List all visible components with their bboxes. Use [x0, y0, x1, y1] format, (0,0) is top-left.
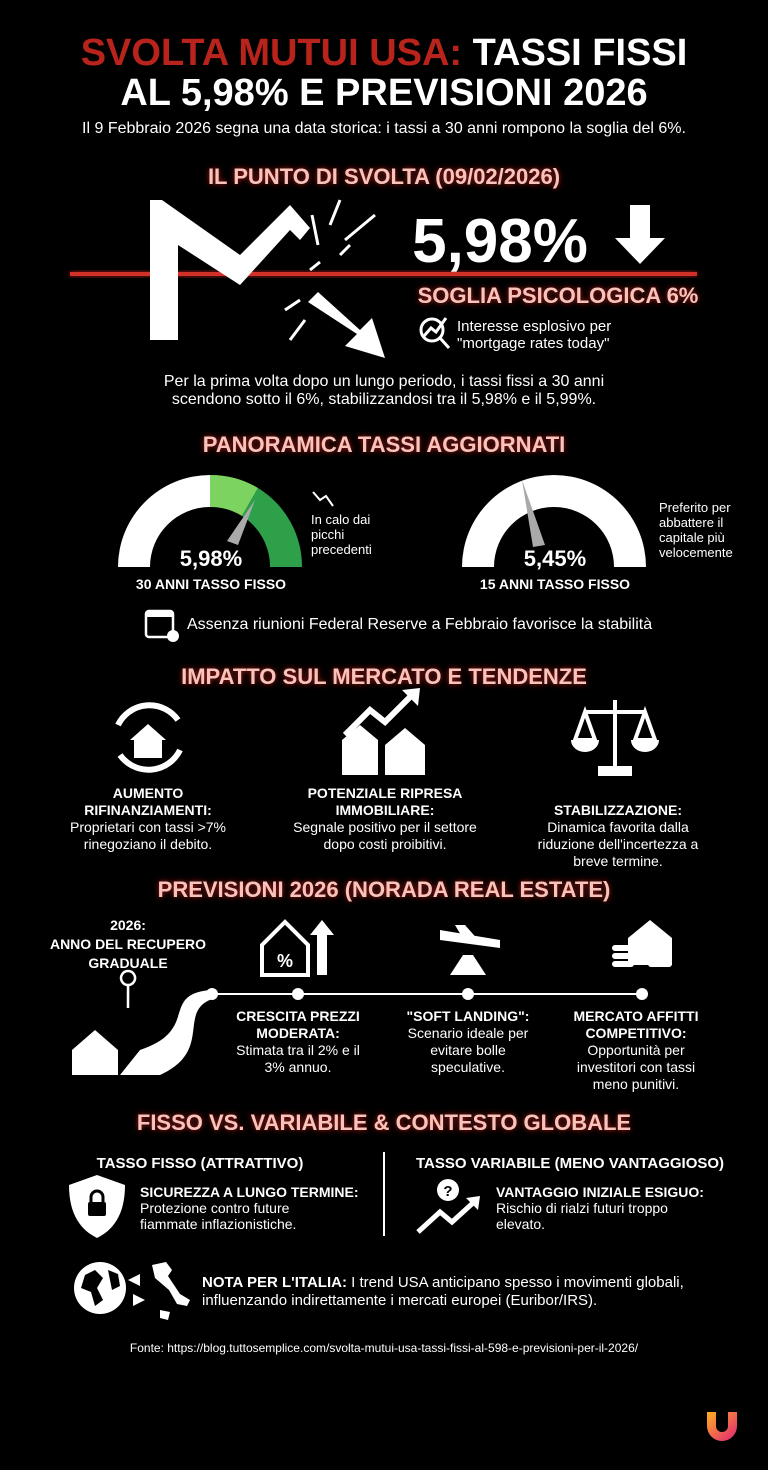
heading: panoramica: PANORAMICA TASSI AGGIORNATI: [203, 432, 565, 457]
text: aumento: Proprietari con tassi >7%: [70, 819, 226, 835]
big rate: 5,98%: [412, 207, 588, 276]
note: preferito: velocemente: [659, 545, 733, 560]
source: Fonte: https://blog.tuttosemplice.com/svolta-mutui-usa-tassi-fissi-al-598-e-previsioni-per-il-2026/: [130, 1341, 639, 1355]
soglia label: SOGLIA PSICOLOGICA 6%: [418, 283, 698, 308]
text: soft landing: "SOFT LANDING":: [407, 1008, 529, 1024]
note: in calo: picchi: [311, 527, 344, 542]
icon: plane landing: [440, 925, 500, 975]
text: crescita: Stimata tra il 2% e il: [236, 1042, 360, 1058]
text: soft landing: speculative.: [431, 1059, 505, 1075]
title: AL 5,98% E PREVISIONI 2026: [120, 72, 648, 114]
text: vantaggio: [496, 1184, 704, 1232]
icon: house percent: [262, 920, 334, 975]
subheadings: [97, 1155, 724, 1172]
text: aumento: rinegoziano il debito.: [84, 836, 212, 852]
text: affitti: [574, 1008, 698, 1092]
icon: scales: [573, 700, 657, 774]
heading: punto di svolta: IL PUNTO DI SVOLTA (09/02/2026): [208, 164, 560, 189]
note: preferito: Preferito per: [659, 500, 731, 515]
subheadings: TASSO FISSO (ATTRATTIVO): [97, 1155, 303, 1172]
fed note: Assenza riunioni Federal Reserve a Febbraio favorisce la stabilità: [187, 616, 652, 633]
note: preferito: capitale più: [659, 530, 725, 545]
note: in calo: In calo dai: [311, 512, 370, 527]
text: stabilizzazione: Dinamica favorita dalla: [547, 819, 689, 835]
icon: shield: [69, 1175, 125, 1238]
note: in calo: [311, 492, 372, 557]
subheadings: TASSO VARIABILE (MENO VANTAGGIOSO): [416, 1155, 724, 1172]
logo: [707, 1412, 737, 1441]
text: sicurezza: [140, 1184, 359, 1232]
text: affitti: COMPETITIVO:: [585, 1025, 687, 1041]
text: soft landing: Scenario ideale per: [408, 1025, 529, 1041]
paragraph: scendono sotto il 6%, stabilizzandosi tra il 5,98% e il 5,99%.: [172, 391, 596, 408]
text: 2026: [50, 917, 206, 971]
heading: previsioni: PREVISIONI 2026 (NORADA REAL ESTATE): [158, 877, 610, 902]
text: ripresa: [293, 785, 477, 852]
text: stabilizzazione: [538, 802, 699, 869]
text: sicurezza: fiammate inflazionistiche.: [140, 1216, 296, 1232]
icon: coins house: [612, 920, 672, 967]
text: aumento: RIFINANZIAMENTI:: [84, 802, 212, 818]
gauge 30 anni: 5,98%: [180, 546, 242, 571]
gauge 15 anni: 15 ANNI TASSO FISSO: [480, 576, 630, 592]
text: affitti: MERCATO AFFITTI: [574, 1008, 698, 1024]
note: in calo: precedenti: [311, 542, 372, 557]
threshold line: [70, 272, 697, 276]
search text: Interesse esplosivo per: [457, 318, 611, 335]
note: preferito: abbattere il: [659, 515, 723, 530]
text: ripresa: IMMOBILIARE:: [336, 802, 434, 818]
text: aumento: [70, 785, 226, 852]
text: stabilizzazione: breve termine.: [573, 853, 663, 869]
gauge 15 anni: [462, 475, 646, 592]
icon: house percent: %: [277, 951, 293, 971]
title: [81, 32, 687, 114]
subtitle: Il 9 Febbraio 2026 segna una data storica: i tassi a 30 anni rompono la soglia del 6%.: [82, 120, 686, 137]
text: vantaggio: Rischio di rialzi futuri troppo: [496, 1200, 668, 1216]
text: ripresa: POTENZIALE RIPRESA: [308, 785, 462, 801]
text: vantaggio: elevato.: [496, 1216, 545, 1232]
nota italia: [202, 1274, 684, 1309]
text: crescita: CRESCITA PREZZI: [236, 1008, 360, 1024]
text: aumento: AUMENTO: [113, 785, 183, 801]
text: stabilizzazione: riduzione dell'incertezza a: [538, 836, 699, 852]
icon: question trend: ?: [443, 1183, 453, 1200]
text: sicurezza: SICUREZZA A LUNGO TERMINE:: [140, 1184, 359, 1200]
icon: road with house: [72, 971, 215, 1075]
text: crescita: [236, 1008, 360, 1075]
search text: [457, 318, 611, 352]
heading: impatto: IMPATTO SUL MERCATO E TENDENZE: [181, 664, 587, 689]
search text: "mortgage rates today": [457, 335, 609, 352]
title: SVOLTA MUTUI USA: TASSI FISSI: [81, 32, 687, 74]
icon: down arrow: [615, 205, 665, 264]
text: crescita: 3% annuo.: [265, 1059, 331, 1075]
paragraph: [164, 373, 604, 408]
gauge 15 anni: 5,45%: [524, 546, 586, 571]
text: 2026: GRADUALE: [88, 955, 168, 971]
text: 2026: ANNO DEL RECUPERO: [50, 936, 206, 952]
nota italia: NOTA PER L'ITALIA: I trend USA anticipano spesso i movimenti globali,: [202, 1274, 684, 1291]
text: sicurezza: Protezione contro future: [140, 1200, 290, 1216]
text: soft landing: [407, 1008, 529, 1075]
paragraph: Per la prima volta dopo un lungo periodo, i tassi fissi a 30 anni: [164, 373, 604, 390]
icon: question trend: [418, 1179, 480, 1232]
icon: calendar: [146, 611, 179, 642]
text: stabilizzazione: STABILIZZAZIONE:: [554, 802, 682, 818]
nota italia: influenzando indirettamente i mercati europei (Euribor/IRS).: [202, 1292, 597, 1309]
chart: breaking line: [150, 200, 385, 358]
gauge 30 anni: 30 ANNI TASSO FISSO: [136, 576, 286, 592]
heading: fisso vs variabile: FISSO VS. VARIABILE & CONTESTO GLOBALE: [137, 1110, 631, 1135]
note: preferito: [659, 500, 733, 560]
text: 2026: 2026:: [110, 917, 146, 933]
text: vantaggio: VANTAGGIO INIZIALE ESIGUO:: [496, 1184, 704, 1200]
text: ripresa: dopo costi proibitivi.: [324, 836, 446, 852]
text: soft landing: evitare bolle: [430, 1042, 506, 1058]
timeline: [206, 988, 648, 1000]
text: ripresa: Segnale positivo per il settore: [293, 819, 477, 835]
gauge 30 anni: [118, 475, 302, 592]
text: crescita: MODERATA:: [256, 1025, 340, 1041]
icon: search trend: [421, 318, 449, 348]
text: affitti: meno punitivi.: [593, 1076, 679, 1092]
icon: rising houses: [342, 688, 425, 775]
text: affitti: Opportunità per: [587, 1042, 685, 1058]
icon: refinance house: [118, 705, 180, 770]
icon: globe and italy: [74, 1262, 190, 1320]
text: affitti: investitori con tassi: [577, 1059, 695, 1075]
